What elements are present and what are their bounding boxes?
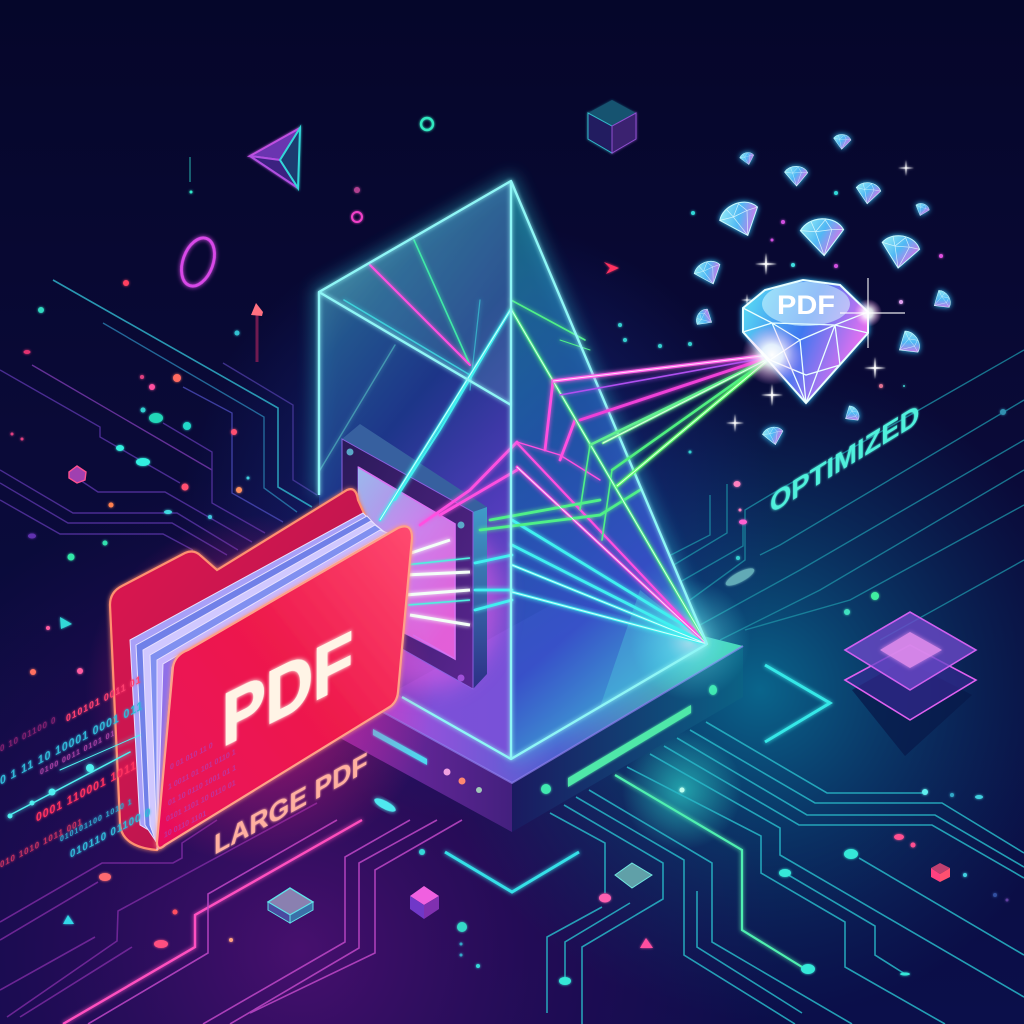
icon: small cubes [60, 466, 950, 948]
icon: magenta ring small [352, 212, 362, 222]
icon: cube top [588, 100, 636, 153]
faint document lines: 1 0011 01 101 0110 1 [168, 747, 236, 792]
impact burst [742, 325, 802, 385]
teal rays through frame [405, 558, 470, 605]
green status bar [568, 705, 691, 787]
icon: layers [845, 612, 976, 756]
binary data stream: 0100 0011 0101 01 [40, 728, 115, 777]
small diamonds [692, 133, 953, 446]
binary data stream: 0001 110001 1011 [36, 757, 137, 825]
circuit traces: lower left [0, 803, 462, 1024]
icon: teal ring [421, 118, 433, 130]
prism halo [319, 181, 707, 759]
folder label: PDF [222, 614, 353, 763]
icon: red arrow marker [604, 262, 619, 274]
prism body [319, 181, 750, 759]
circuit traces: left [0, 280, 317, 555]
faint document lines: 10 0110 1101 [164, 808, 207, 840]
folder front panel [157, 526, 412, 848]
large diamond [742, 278, 905, 403]
stream light streaks [8, 735, 140, 818]
binary data stream: 010110 01100 0 [70, 806, 151, 861]
led dots left [444, 768, 482, 793]
faint document lines [164, 740, 237, 840]
icon: up marker head [251, 303, 263, 316]
refracted beams in prism [320, 240, 707, 644]
rays to diamond [553, 355, 770, 486]
circuit traces: lower right [547, 722, 1024, 1024]
binary data stream: 0 10 01100 0 [0, 714, 56, 754]
input frame [342, 424, 487, 689]
diamond label: PDF [777, 290, 835, 320]
faint document lines: 0 01 010 11 0 [170, 740, 213, 772]
folder pages [130, 513, 398, 850]
chevron bottom [445, 852, 579, 892]
status dot far right [709, 685, 717, 695]
faint document lines: 0101 1101 10 0110 01 [166, 778, 236, 824]
ray cores [553, 355, 770, 486]
cyan bar left [373, 729, 427, 765]
binary data stream [0, 674, 151, 870]
bright green trace [615, 775, 802, 967]
icon: ellipse ring [175, 233, 221, 291]
status dots right [541, 784, 551, 794]
light marker [373, 796, 397, 814]
icon: small vertical dash [189, 157, 191, 182]
circuit traces: right [665, 350, 1024, 640]
folder back [110, 489, 385, 850]
icon: up marker stem [256, 315, 258, 362]
particles and nodes [10, 187, 1008, 985]
binary data stream: 0 1 11 10 10001 0001 011 [0, 698, 143, 788]
cyan glow spot [622, 730, 742, 850]
bright white beam cores [380, 309, 707, 644]
label: optimized: OPTIMIZED [770, 398, 919, 520]
icon: outlined triangle [250, 128, 300, 188]
faint document lines: 01 10 0110 1001 01 1 [168, 762, 237, 808]
white rays through frame [405, 540, 470, 625]
glow behind frame [350, 510, 500, 690]
chevron right [765, 665, 830, 742]
pdf folder [110, 489, 412, 850]
binary data stream: 010101 0011 01 [66, 674, 141, 725]
binary data stream: 010 1010 1011 001 [0, 816, 83, 870]
icon: data chip [724, 565, 756, 589]
prism edges [319, 181, 707, 759]
folder glow [85, 515, 435, 865]
label: large pdf: LARGE PDF [214, 747, 368, 862]
binary data stream: 010101100 1010 1 [60, 796, 132, 844]
sparkles [691, 160, 943, 432]
sparkle flare [840, 278, 905, 348]
platform base [340, 600, 743, 832]
